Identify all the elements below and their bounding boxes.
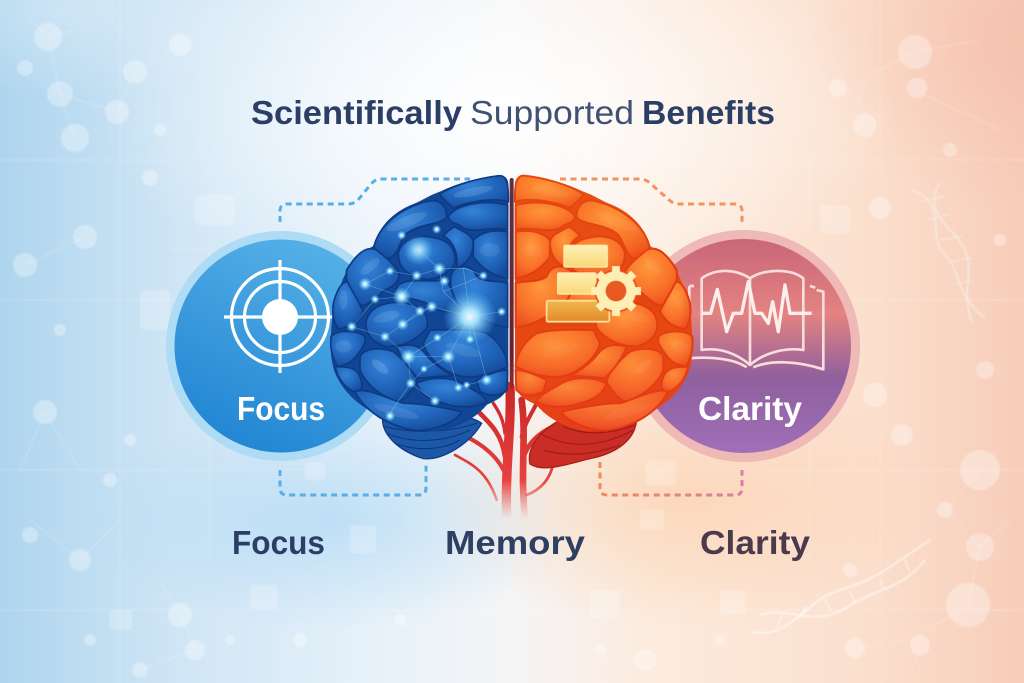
label: Focus in circle: Focus <box>237 390 325 427</box>
right hemisphere (orange) <box>515 175 693 432</box>
label: Clarity: Clarity <box>700 524 811 561</box>
title <box>251 94 775 131</box>
dashed connector: bottom left <box>280 462 426 495</box>
title: Supported <box>470 94 634 131</box>
icon: stacked bars and gear <box>547 245 641 322</box>
panel: clarity circle <box>628 230 860 462</box>
red cerebellum <box>529 415 637 468</box>
blue cerebellum <box>383 414 482 459</box>
dashed connector: bottom right <box>600 462 742 495</box>
label: Focus: Focus <box>232 524 325 561</box>
brain illustration <box>331 175 693 518</box>
brain stem and blood vessels <box>447 387 570 518</box>
title: Benefits <box>642 94 775 131</box>
panel: focus circle <box>166 231 396 461</box>
icon: target <box>224 260 332 373</box>
DNA helix top right <box>912 183 985 322</box>
icon: gear <box>591 266 641 316</box>
label: Memory: Memory <box>445 524 586 561</box>
DNA helix bottom right <box>752 540 930 633</box>
title: Scientifically <box>251 94 463 131</box>
neural network glow <box>346 225 506 421</box>
label: Clarity in circle: Clarity <box>698 390 803 427</box>
left hemisphere (blue) <box>331 175 508 432</box>
icon: book with pulse <box>689 271 823 369</box>
dashed connector: top right <box>560 179 742 222</box>
dashed connector: top left <box>280 179 470 222</box>
central fissure <box>510 178 514 389</box>
